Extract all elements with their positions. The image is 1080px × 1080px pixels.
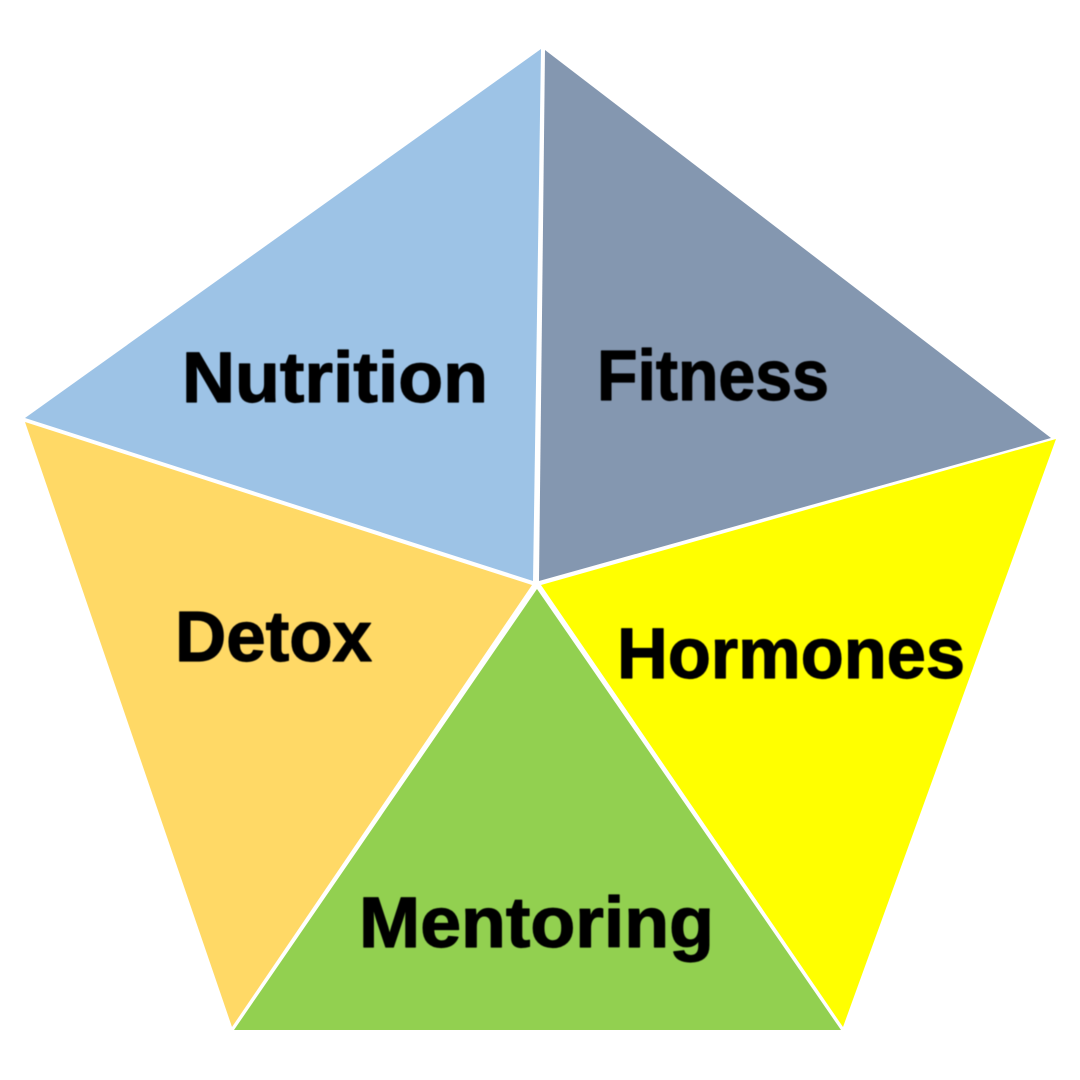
label: Mentoring: Mentoring	[359, 884, 714, 963]
segment: Nutrition	[25, 49, 541, 581]
segment: Mentoring	[234, 589, 841, 1030]
segment: Detox	[25, 422, 532, 1027]
label: Detox: Detox	[175, 598, 372, 677]
label: Nutrition: Nutrition	[182, 339, 488, 418]
segment: Fitness	[539, 50, 1051, 581]
label: Hormones: Hormones	[617, 615, 965, 694]
segment: Hormones	[541, 439, 1056, 1027]
label: Fitness: Fitness	[597, 337, 829, 416]
